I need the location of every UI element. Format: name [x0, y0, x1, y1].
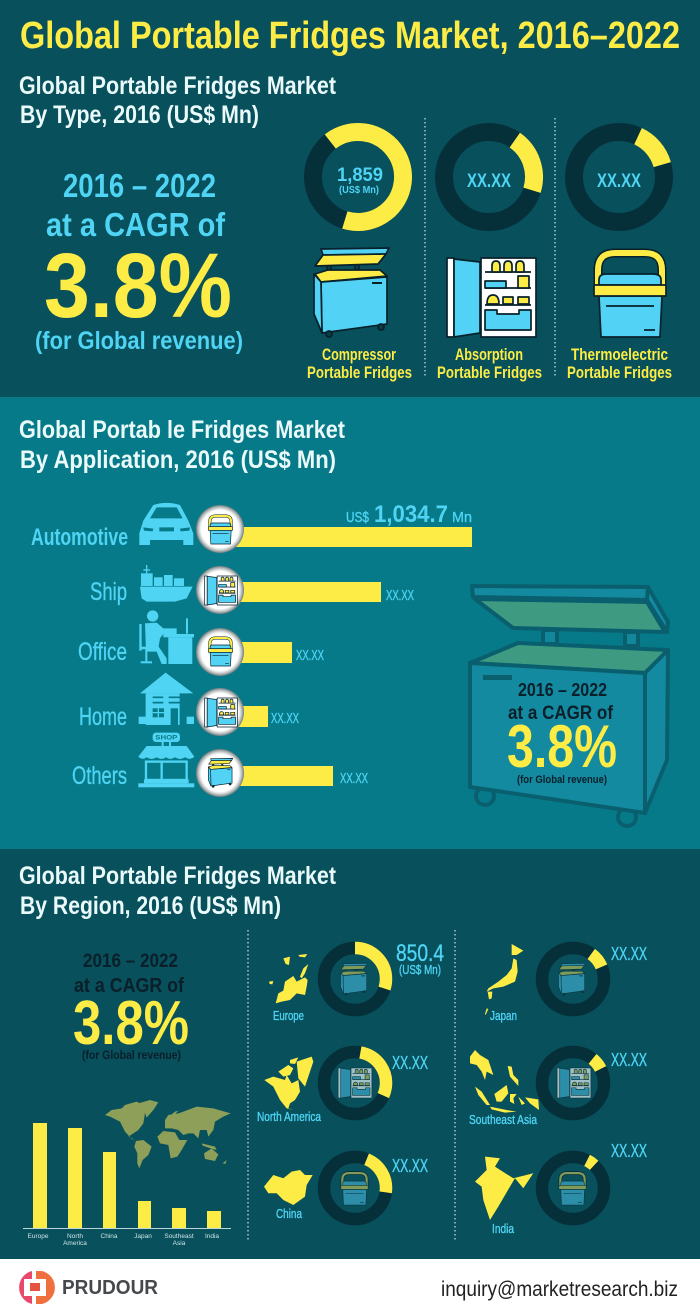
bar chart: regions [23, 1123, 231, 1247]
application labels: Office [78, 638, 127, 666]
callout: CAGR for region section: at a CAGR of [74, 975, 184, 997]
donut: absorption: XX.XX [467, 171, 511, 192]
value: automotive: 1,034.7 [374, 501, 448, 528]
heading: by type: Global Portable Fridges Market [19, 72, 337, 100]
heading: by region: By Region, 2016 (US$ Mn) [20, 892, 281, 920]
illustration: large fridge with CAGR: 3.8% [507, 713, 617, 780]
label: absorption: Portable Fridges [437, 363, 542, 382]
label: thermoelectric [567, 345, 672, 382]
badge: home absorption [196, 688, 244, 736]
bar chart: regions: America [63, 1240, 87, 1247]
icon: shop [138, 733, 194, 787]
callout: CAGR for type section: 2016 – 2022 [63, 167, 216, 204]
icon: car [139, 503, 193, 545]
map: China [264, 1170, 313, 1205]
region values: XX.XX [392, 1053, 428, 1073]
callout: CAGR for type section [35, 167, 243, 355]
heading: by region: Global Portable Fridges Market [19, 862, 337, 890]
contact email: inquiry@marketresearch.biz [441, 1278, 678, 1301]
map: Southeast Asia [470, 1050, 539, 1113]
region values: 850.4 [396, 940, 444, 967]
callout: CAGR for region section: 2016 – 2022 [83, 951, 178, 972]
donut: thermoelectric: XX.XX [597, 171, 641, 192]
heading: by application: Global Portab le Fridges Market [19, 416, 346, 444]
application labels: Ship [90, 578, 127, 606]
icon: office worker [139, 610, 194, 664]
values: other applications: XX.XX [386, 587, 414, 604]
application labels: Others [72, 762, 127, 790]
application labels: Home [79, 703, 127, 731]
badge: ship absorption [196, 566, 244, 614]
badge: others chest [196, 749, 244, 797]
donut: thermoelectric [559, 117, 679, 237]
donut: India [531, 1146, 615, 1230]
logo: Prudour: PRUDOUR [62, 1277, 159, 1299]
region values: XX.XX [611, 1141, 647, 1161]
heading: by type: By Type, 2016 (US$ Mn) [20, 101, 259, 129]
donut: Japan [530, 936, 616, 1022]
value: automotive [346, 501, 472, 528]
donut: Southeast Asia [529, 1039, 617, 1127]
map: India [475, 1157, 533, 1220]
values: other applications: XX.XX [340, 770, 368, 787]
callout: CAGR for region section [73, 951, 189, 1062]
donut: Europe [324, 948, 386, 1010]
bar chart: applications [236, 527, 472, 786]
panel: region section background [0, 849, 700, 1259]
icon: thermoelectric cooler [594, 253, 666, 337]
label: absorption: Absorption [455, 345, 523, 364]
panel: type section background [0, 0, 700, 397]
bar chart: regions: Japan [134, 1233, 152, 1240]
label: thermoelectric: Portable Fridges [567, 363, 672, 382]
region labels [257, 1008, 538, 1236]
region labels: Japan [490, 1008, 517, 1023]
illustration: large fridge with CAGR: at a CAGR of [508, 703, 614, 724]
badge: automotive cooler [196, 505, 244, 553]
donut: compressor: 1,859 [337, 165, 383, 186]
heading: by application: By Application, 2016 (US$ Mn) [20, 446, 336, 474]
donut: China [315, 1148, 395, 1228]
region labels: North America [257, 1109, 322, 1124]
bar chart: regions: Europe [28, 1233, 49, 1240]
icon: compressor fridge [314, 248, 389, 337]
region labels: China [276, 1206, 303, 1221]
values: other applications: XX.XX [271, 710, 299, 727]
region values: XX.XX [392, 1156, 428, 1176]
illustration: large fridge with CAGR: (for Global revenue) [517, 774, 607, 786]
callout: CAGR for region section: 3.8% [73, 989, 189, 1058]
region values: XX.XX [611, 944, 647, 964]
bar chart: regions: Asia [173, 1240, 186, 1247]
callout: CAGR for type section: 3.8% [44, 235, 232, 337]
donut: compressor [295, 114, 421, 240]
region labels: Europe [273, 1008, 304, 1023]
donut: compressor: (US$ Mn) [339, 185, 379, 196]
label: compressor [307, 345, 412, 382]
illustration: large fridge with CAGR [470, 586, 668, 826]
donut: North America [319, 1047, 391, 1119]
region values: XX.XX [611, 1050, 647, 1070]
label: compressor: Compressor [322, 345, 396, 364]
value: automotive: US$ [346, 509, 370, 526]
footer [0, 1259, 700, 1309]
bar chart: regions: India [205, 1233, 219, 1240]
values: other applications [271, 587, 414, 787]
value: automotive: Mn [452, 509, 472, 526]
bar chart: regions: North [67, 1233, 83, 1240]
badge: office cooler [196, 628, 244, 676]
map: Japan [485, 944, 523, 1015]
panel: application section background [0, 397, 700, 849]
heading: by application [19, 416, 346, 474]
bar chart: regions: China [101, 1233, 118, 1240]
bar chart: regions: Southeast [164, 1233, 194, 1240]
application labels: Automotive [31, 524, 128, 551]
heading: by type [19, 72, 337, 129]
illustration: large fridge with CAGR: 2016 – 2022 [518, 680, 607, 700]
icon: house [139, 673, 194, 725]
logo: Prudour [19, 1271, 159, 1304]
heading: by region [19, 862, 337, 920]
values: other applications: XX.XX [296, 647, 324, 664]
label: absorption [437, 345, 542, 382]
label: compressor: Portable Fridges [307, 363, 412, 382]
world map [105, 1100, 231, 1168]
map: North America [264, 1057, 313, 1110]
icon: shop: SHOP [155, 735, 177, 741]
icon: absorption fridge [447, 258, 536, 337]
application labels [31, 524, 128, 790]
region values: (US$ Mn) [399, 962, 441, 977]
label: thermoelectric: Thermoelectric [571, 345, 668, 364]
region labels: Southeast Asia [469, 1112, 538, 1127]
callout: CAGR for region section: (for Global revenue) [82, 1048, 181, 1062]
region labels: India [492, 1221, 515, 1236]
map: Europe [269, 954, 308, 1003]
callout: CAGR for type section: at a CAGR of [46, 206, 226, 243]
icon: ship [140, 565, 193, 602]
callout: CAGR for type section: (for Global revenue) [35, 327, 243, 355]
region values [392, 940, 647, 1176]
donut: absorption [426, 114, 552, 240]
